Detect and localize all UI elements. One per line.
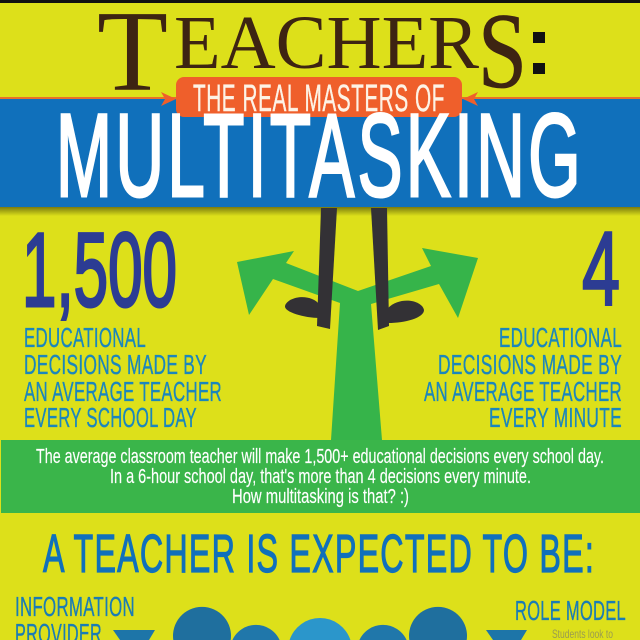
text: left stat description: EVERY SCHOOL DAY [24, 402, 197, 433]
title: Teachers: EACHER [174, 1, 479, 85]
label: information provider [15, 591, 135, 640]
text: left stat description: EDUCATIONAL [24, 322, 146, 353]
icon: legs and shoes [285, 208, 424, 330]
icon: forked arrow [237, 248, 478, 440]
banner [0, 97, 640, 207]
text: left stat description: DECISIONS MADE BY [24, 349, 207, 380]
stat: 1,500: 1,500 [22, 212, 177, 329]
subtitle pill [161, 77, 478, 120]
icon: right arrow [486, 630, 527, 640]
callout band: How multitasking is that? :) [232, 486, 409, 508]
icon: people circles [173, 607, 467, 640]
icon: left arrow [113, 630, 155, 640]
callout band [1, 440, 640, 513]
text: left stat description [24, 322, 222, 433]
text: left stat description: AN AVERAGE TEACHER [24, 376, 222, 407]
text: right stat description [424, 322, 622, 433]
label: role model [515, 595, 626, 640]
title: Teachers [97, 0, 545, 115]
label: information provider: INFORMATION [15, 591, 135, 622]
stat: 4: 4 [582, 211, 620, 328]
shadow below banner [0, 207, 640, 216]
